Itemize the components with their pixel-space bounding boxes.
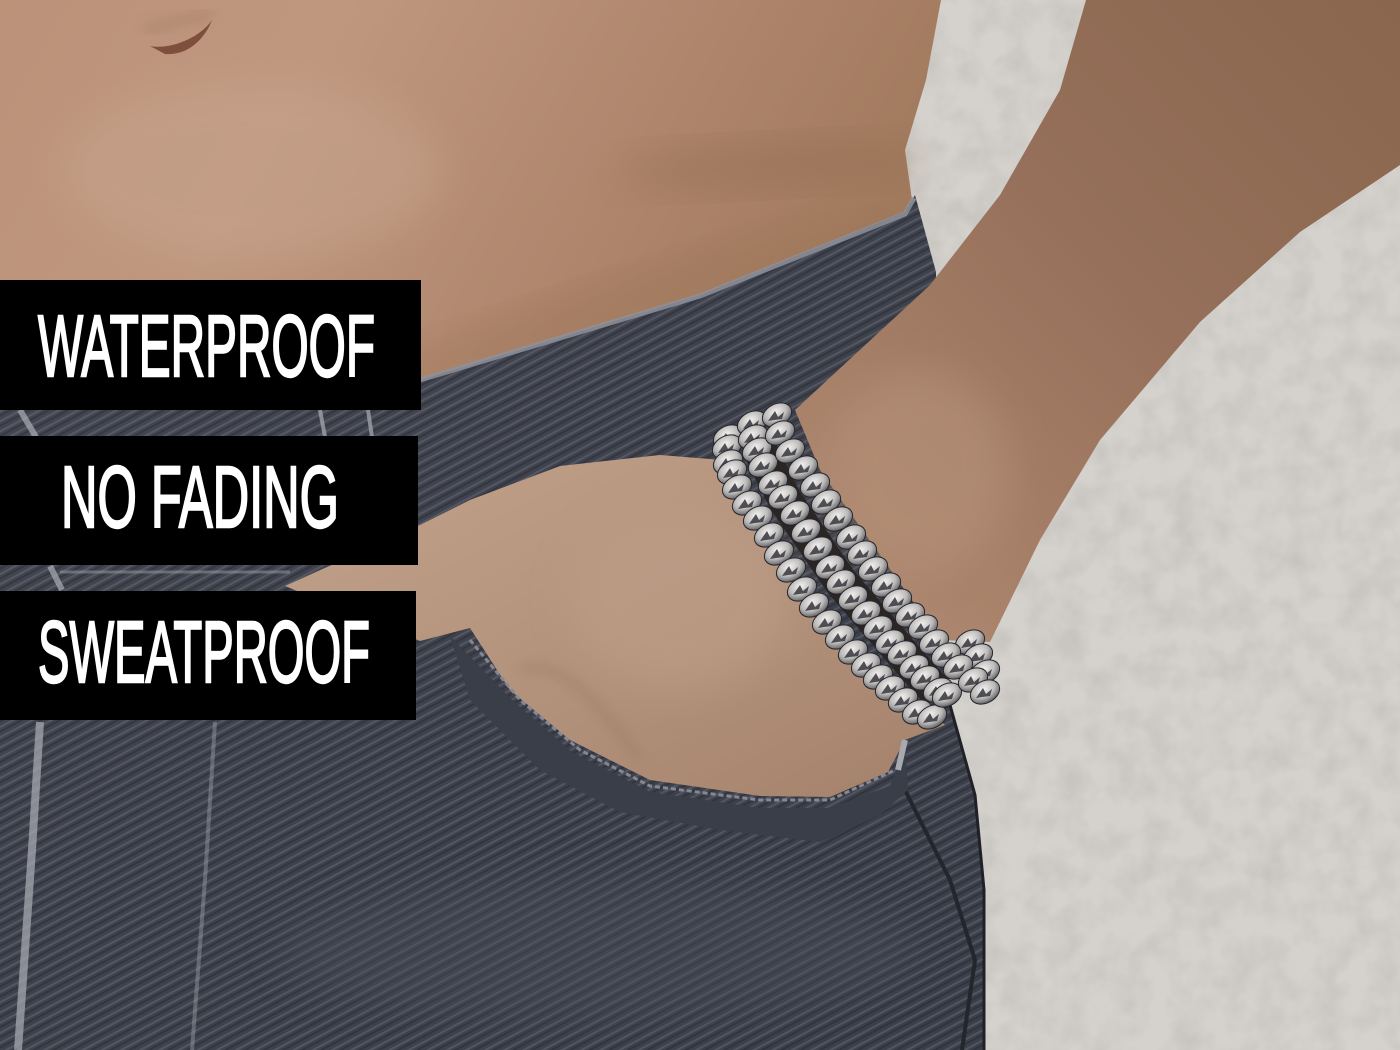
bracelet stack	[707, 397, 1005, 735]
strand three	[757, 397, 1005, 710]
hidden strand	[950, 624, 1005, 690]
label: sweatproof: SWEATPROOF	[38, 604, 370, 701]
strand one	[707, 419, 952, 735]
wall background	[880, 0, 1400, 1050]
navel	[145, 14, 212, 54]
waistband edge	[420, 198, 914, 380]
label: waterproof: WATERPROOF	[38, 298, 375, 395]
strand two	[732, 405, 967, 713]
label: no fading: NO FADING	[61, 449, 339, 546]
label: waterproof	[0, 280, 421, 410]
label: sweatproof	[0, 591, 416, 720]
pocket edge band	[450, 636, 908, 842]
arm	[795, 0, 1400, 642]
torso skin	[0, 0, 941, 420]
hand in pocket	[285, 455, 945, 797]
label: no fading	[0, 436, 418, 565]
jeans	[0, 195, 985, 1050]
pocket seam	[905, 790, 975, 1050]
belt loop and seams	[18, 410, 372, 1050]
